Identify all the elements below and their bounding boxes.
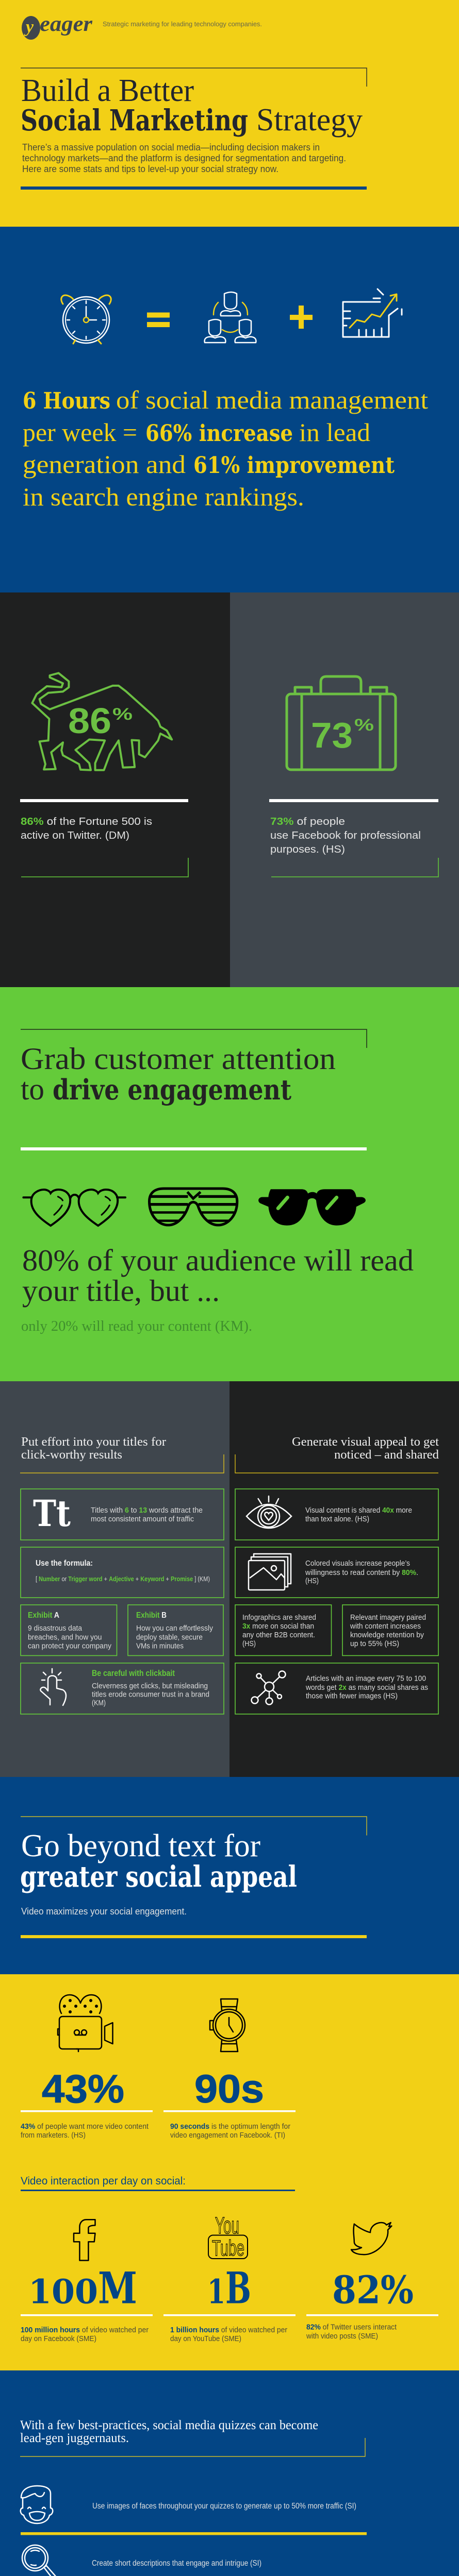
card: relevant imagery: knowledge retention by [350,1631,424,1639]
section: grab attention [0,987,459,1381]
heading: to [21,1072,44,1106]
stat: 43 percent: 43% of people want more video content [21,2123,149,2131]
headline stat: 66% increase [145,420,293,447]
title: Social Marketing [21,104,248,138]
icon: youtube logo [208,2212,248,2261]
stat text: use Facebook for professional [270,830,421,841]
icon: briefcase with 73 percent: % [354,716,374,734]
card: infographics [235,1605,331,1656]
headline stat [23,385,428,511]
heading [21,1042,336,1106]
stat: 100M facebook: M [98,2263,137,2313]
stat: 43 percent: from marketers. (HS) [21,2131,86,2140]
card: formula: [ Number or Trigger word + Adjective + Keyword + Promise ] (KM) [36,1575,210,1583]
icon: black sunglasses [258,1189,366,1226]
card: visual content shared: Visual content is shared 40x more [305,1506,412,1515]
tip: faces [21,2486,356,2523]
icon: briefcase with 73 percent [287,676,396,770]
stat text: 86% of the Fortune 500 is [21,816,152,827]
card: image frequency [235,1663,438,1714]
stat: 90 seconds: 90s [194,2067,264,2111]
stat: 43 percent [21,1995,153,2140]
card: exhibit B: Exhibit B [136,1611,167,1620]
icon: youtube logo: Tube [212,2236,244,2261]
tip: descriptions [22,2545,261,2576]
intro text: Here are some stats and tips to level-up your social strategy now. [22,163,278,174]
headline stat: in lead [299,418,370,447]
icon: pointing hand [40,1669,66,1705]
card: colored visuals [235,1547,438,1598]
card: visual content shared: than text alone. (HS) [305,1515,369,1523]
card: colored visuals: Colored visuals increase people’s [305,1559,410,1568]
icon: eye [247,1496,291,1528]
icon: facebook f [74,2219,95,2261]
stat text: 73% of people [270,816,345,827]
card: formula: Use the formula: [36,1559,93,1568]
icon: smiling face [21,2486,53,2523]
stat: 20 percent content: only 20% will read your content (KM). [21,1318,252,1334]
tip: faces: Use images of faces throughout your quizzes to generate up to 50% more traffic (SI) [92,2502,356,2511]
stat: 1B youtube: 1 billion hours of video watched per [170,2326,287,2334]
card: exhibit A: breaches, and how you [28,1633,102,1641]
title: Strategy [256,103,363,138]
icon: Tt: Tt [33,1492,71,1535]
logo: eager [40,12,93,36]
intro text: There’s a massive population on social media—including decision makers in [22,142,320,152]
heading: drive engagement [53,1073,291,1106]
section: intro header [0,0,459,227]
card: exhibit B: VMs in minutes [136,1641,184,1651]
heading [21,1435,166,1462]
card: exhibit B [128,1605,223,1656]
icon: wristwatch [210,1999,245,2052]
stat: 82 percent twitter: with video posts (SME) [306,2332,378,2341]
icon: stacked images [249,1554,291,1590]
card: clickbait warning: titles erode consumer trust in a brand [92,1690,209,1699]
card: clickbait warning [21,1663,224,1714]
tip: descriptions: Create short descriptions that engage and intrigue (SI) [92,2559,261,2568]
card: relevant imagery: up to 55% (HS) [350,1639,399,1648]
stat: 100M facebook [21,2219,153,2343]
logo: y [24,18,34,37]
stat: 80 percent title: 80% of your audience will read [22,1243,414,1277]
intro text [22,142,346,174]
title [21,73,363,138]
icon: bull with 86 percent: 86 [68,701,111,741]
stat: 90 seconds [163,1999,296,2140]
card: relevant imagery [342,1605,438,1656]
stat text: active on Twitter. (DM) [21,830,129,841]
tagline: Strategic marketing for leading technology companies. [103,20,262,28]
stat: 100M facebook: 100 [28,2272,98,2311]
card: relevant imagery: with content increases [350,1622,421,1631]
headline stat: per week = [23,418,137,447]
icon: youtube logo: You [215,2212,239,2239]
card: visual content shared [235,1489,438,1540]
card: infographics: 3x more on social than [242,1622,314,1631]
headline stat: in search engine rankings. [23,482,304,511]
section: six hours stat [0,227,459,592]
heading: Generate visual appeal to get [292,1435,439,1449]
headline stat: 6 Hours [23,388,110,414]
heading: Grab customer attention [21,1042,336,1076]
card: exhibit A [21,1605,117,1656]
icon: film camera [58,1995,112,2052]
heading: Put effort into your titles for [21,1435,166,1449]
stat: 90 seconds: 90 seconds is the optimum length for [170,2123,290,2131]
card: clickbait warning: (KM) [92,1699,106,1707]
card: word count: most consistent amount of traffic [91,1515,194,1523]
heading: greater social appeal [20,1860,297,1894]
icon: magnifying glass [22,2545,57,2576]
stat text [21,816,152,841]
stat: 80 percent title [22,1243,414,1308]
panel: facebook professional use [230,592,459,987]
card: image frequency: Articles with an image every 75 to 100 [306,1674,426,1683]
card: colored visuals: (HS) [305,1577,319,1585]
title: Build a Better [21,73,194,108]
stat: 100M facebook: day on Facebook (SME) [21,2335,96,2343]
card: image frequency: those with fewer images (HS) [306,1692,398,1701]
headline stat: generation and [23,450,186,479]
stat: 82 percent twitter [306,2223,438,2341]
card: exhibit A: 9 disastrous data [28,1624,83,1633]
heading: noticed – and shared [334,1448,439,1462]
card: infographics: any other B2B content. [242,1631,315,1639]
heading: Go beyond text for [21,1828,260,1863]
heading: click-worthy results [21,1448,122,1462]
panel: fortune 500 on twitter [0,592,230,987]
subheading: video interaction: Video interaction per day on social: [21,2175,186,2187]
panel: visual appeal tips [230,1381,459,1777]
subhead: Video maximizes your social engagement. [21,1906,187,1917]
heading: With a few best-practices, social media quizzes can become [20,2418,318,2432]
heading: lead-gen juggernauts. [20,2431,129,2445]
logo [22,12,93,40]
card: exhibit B: How you can effortlessly [136,1624,213,1633]
equals sign [147,312,170,327]
card: relevant imagery: Relevant imagery paired [350,1613,426,1622]
heading [292,1435,439,1462]
icon: twitter bird [351,2223,391,2255]
stat: 82 percent twitter: 82% of Twitter users interact [306,2324,397,2332]
stat: 43 percent: 43% [42,2067,124,2111]
icon: heart glasses [23,1190,125,1226]
icon: team of people [205,292,256,343]
panel: titles tips [0,1381,230,1777]
icon: bull with 86 percent: % [112,705,133,723]
card: clickbait warning: Cleverness get clicks, but misleading [92,1682,208,1690]
icon: shutter shades [150,1189,237,1225]
card: infographics: Infographics are shared [242,1613,316,1622]
icon: alarm clock [61,295,111,344]
plus sign [290,306,313,329]
icon: bull with 86 percent [32,673,172,770]
section: quizzes [0,2370,459,2576]
stat text: purposes. (HS) [270,844,345,855]
card: exhibit B: deploy stable, secure [136,1633,203,1641]
icon: network nodes [252,1671,286,1704]
card: clickbait warning: Be careful with clickbait [92,1669,175,1678]
stat: 1B youtube [163,2212,296,2343]
title bracket [21,68,367,87]
card: colored visuals: willingness to read content by 80%. [305,1568,418,1577]
stat: 1B youtube: day on YouTube (SME) [170,2335,241,2343]
card: formula [21,1547,224,1598]
headline stat: of social media management [116,385,428,414]
stat: 1B youtube: 1 [207,2272,225,2311]
card: image frequency: words get 2x as many social shares as [305,1683,428,1692]
stat: 82 percent twitter: 82% [332,2268,414,2312]
card: word count [21,1489,224,1540]
headline stat: 61% improvement [193,452,395,479]
heading [20,1828,297,1894]
section: beyond text heading [0,1777,459,1974]
icon: rising chart [343,289,402,337]
stat: 1B youtube: B [225,2263,251,2313]
card: exhibit A: can protect your company [28,1641,111,1651]
stat: 80 percent title: your title, but ... [22,1274,220,1308]
stat: 90 seconds: video engagement on Facebook. (TI) [170,2131,285,2140]
stat text [270,816,421,855]
card: word count: Titles with 6 to 13 words attract the [91,1506,203,1515]
section: video stats [0,1974,459,2370]
card: exhibit A: Exhibit A [28,1611,59,1620]
icon: briefcase with 73 percent: 73 [311,715,353,755]
intro text: technology markets—and the platform is designed for segmentation and targeting. [22,152,346,163]
stat: 100M facebook: 100 million hours of video watched per [21,2326,149,2334]
card: infographics: (HS) [242,1639,256,1648]
heading [20,2418,318,2445]
